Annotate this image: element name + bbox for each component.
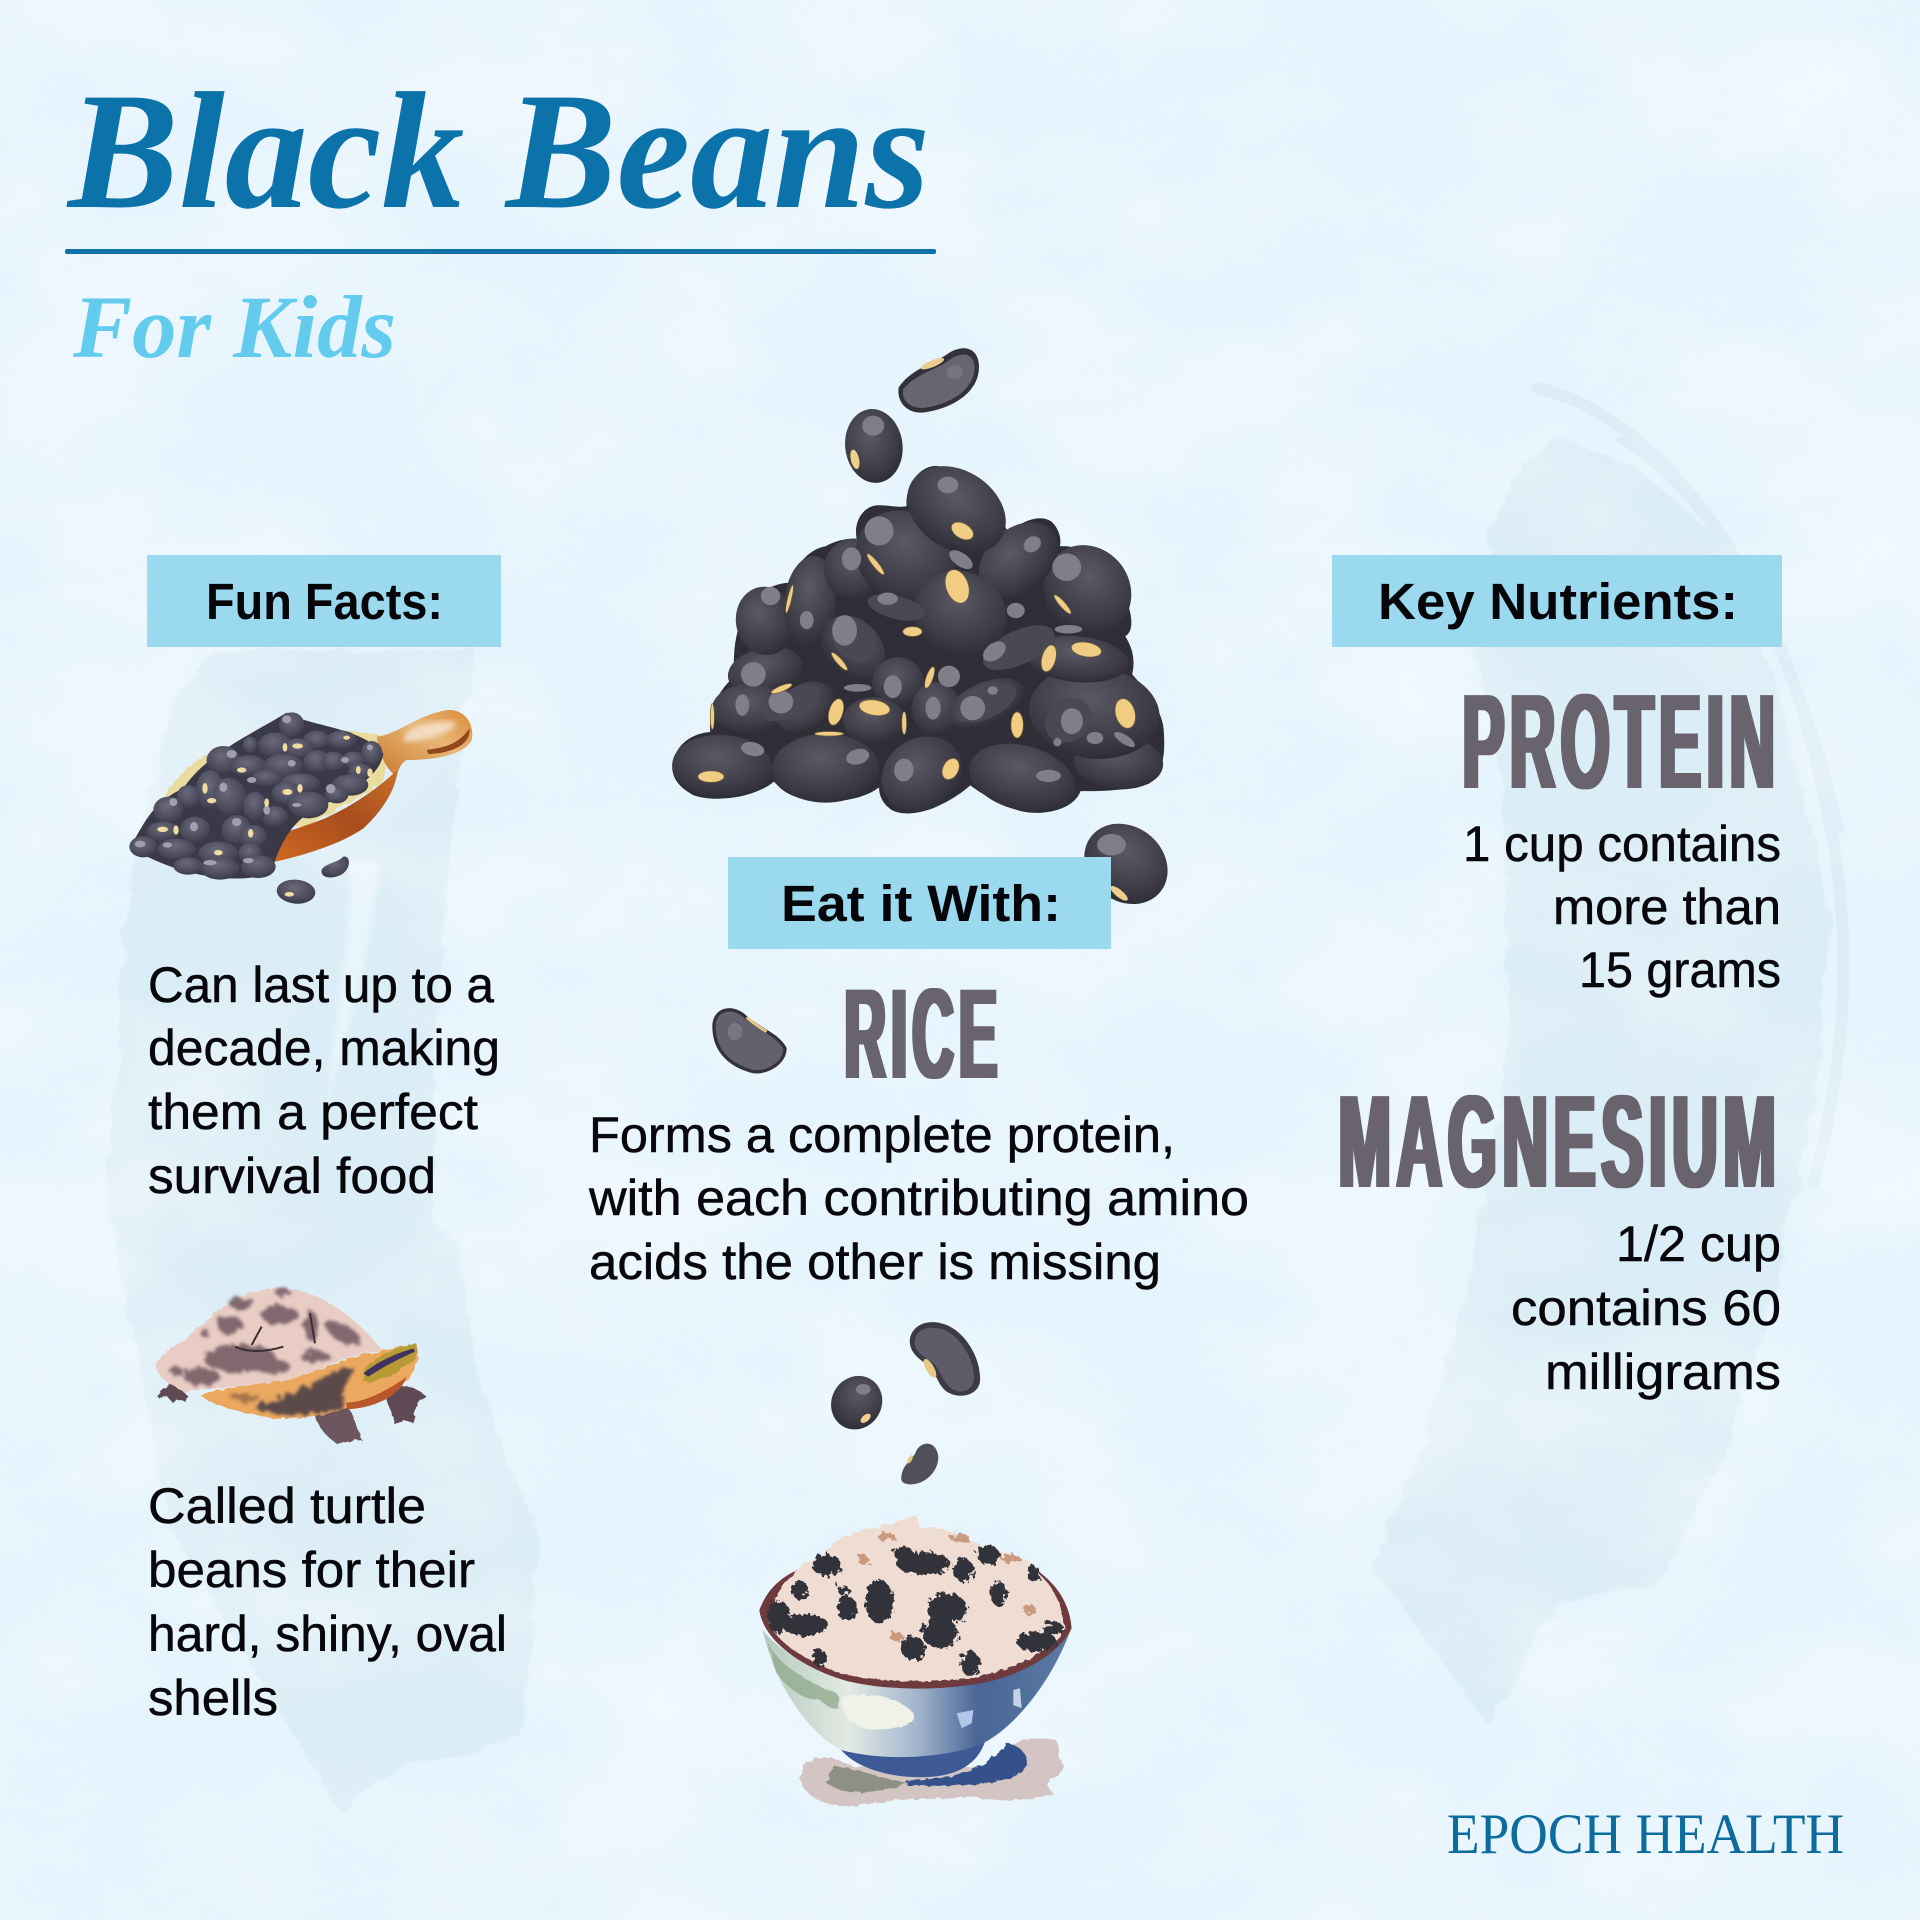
falling beans — [821, 1322, 980, 1484]
illustration: scoop of black beans — [129, 710, 472, 905]
illustration: pile of black beans — [671, 348, 1180, 919]
text: protein amount: more than — [1553, 879, 1781, 935]
text: magnesium amount: contains 60 — [1511, 1280, 1781, 1336]
falling bean round — [839, 403, 909, 489]
text: protein amount: 1 cup contains — [1463, 816, 1781, 872]
turtle head — [363, 1344, 417, 1382]
panel: key nutrients heading: Key Nutrients: — [1378, 573, 1738, 630]
text: fact about shelf life — [148, 957, 500, 1204]
turtle shell — [157, 1288, 382, 1392]
text: protein amount — [1463, 816, 1781, 998]
illustration: turtle — [157, 1288, 427, 1443]
text: fact about turtle beans: Called turtle — [148, 1478, 426, 1534]
turtle body — [200, 1346, 418, 1419]
text: protein amount: 15 grams — [1579, 942, 1781, 998]
panel: fun facts heading — [147, 555, 501, 647]
text: magnesium amount — [1511, 1216, 1781, 1400]
text: rice explanation: with each contributing amino — [588, 1170, 1249, 1226]
beans in the scoop — [129, 712, 383, 905]
falling bean top — [898, 348, 979, 413]
title: Black Beans — [66, 59, 930, 244]
text: rice explanation — [588, 1107, 1249, 1290]
icon: bean beside rice — [714, 1010, 785, 1072]
text: fact about turtle beans — [148, 1478, 507, 1726]
text: fact about turtle beans: shells — [148, 1670, 278, 1726]
falling bean right — [1072, 809, 1180, 919]
text: rice explanation: acids the other is missing — [589, 1234, 1161, 1290]
bean pile — [671, 449, 1164, 824]
rice — [767, 1517, 1065, 1681]
turtle legs — [157, 1384, 427, 1443]
text: fact about shelf life: Can last up to a — [148, 957, 494, 1013]
title underline — [65, 249, 936, 254]
text: fact about turtle beans: beans for their — [148, 1542, 475, 1598]
panel: fun facts heading: Fun Facts: — [206, 573, 443, 630]
subtitle: For Kids — [72, 279, 396, 377]
text: fact about turtle beans: hard, shiny, oval — [148, 1606, 507, 1662]
text: magnesium amount: 1/2 cup — [1616, 1216, 1781, 1272]
text: fact about shelf life: them a perfect — [148, 1084, 478, 1140]
logo: epoch health: EPOCH HEALTH — [1447, 1803, 1844, 1866]
bowl — [763, 1630, 1071, 1777]
panel: eat it with heading — [728, 857, 1111, 949]
text: rice explanation: Forms a complete protein, — [589, 1107, 1175, 1163]
text: magnesium amount: milligrams — [1545, 1344, 1781, 1400]
panel: key nutrients heading — [1332, 555, 1782, 647]
bowl rim — [759, 1563, 1072, 1689]
panel: eat it with heading: Eat it With: — [781, 875, 1061, 932]
text: fact about shelf life: decade, making — [148, 1020, 500, 1076]
bowl shadow — [800, 1738, 1065, 1806]
text: RICE — [844, 963, 1002, 1106]
illustration: beans falling into rice bowl — [759, 1322, 1072, 1806]
scoop bowl and handle — [163, 710, 472, 862]
text: fact about shelf life: survival food — [148, 1148, 436, 1204]
